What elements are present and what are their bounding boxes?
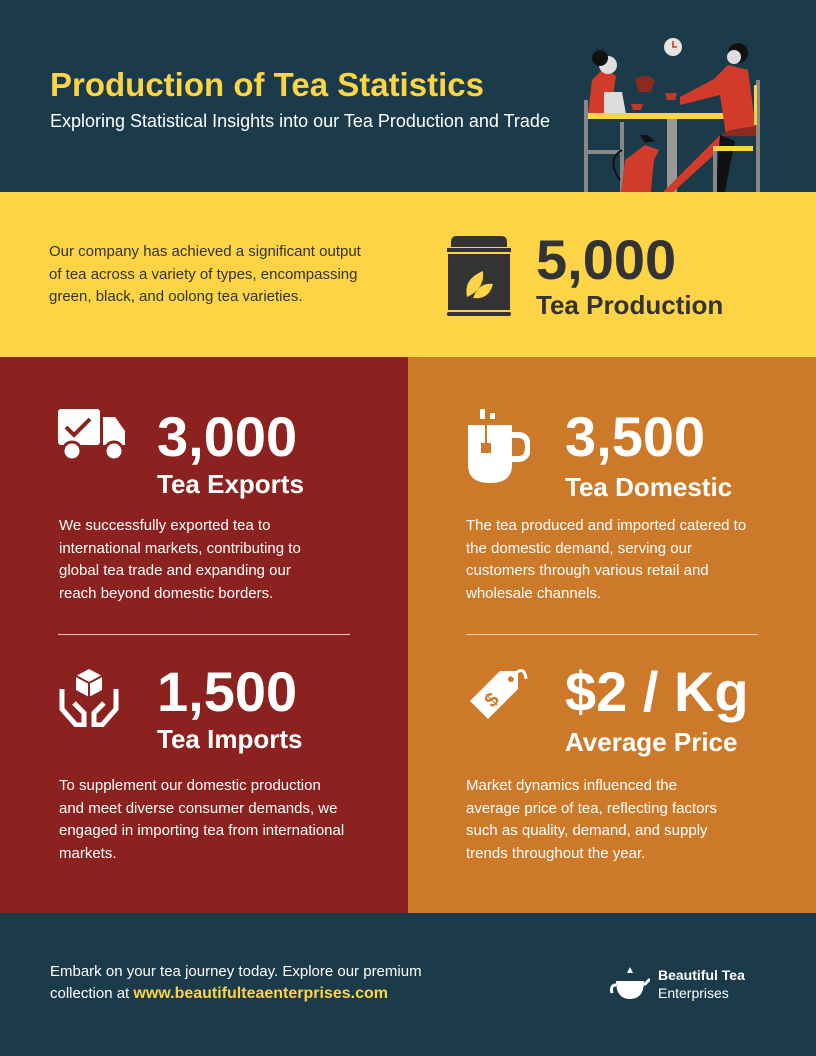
price text: Market dynamics influenced the average price of tea, reflecting factors such as quality, demand, and supply trends throughout the year. [466, 777, 717, 862]
icon: hands with box [60, 669, 118, 727]
logo: Enterprises [658, 985, 729, 1001]
title: Production of Tea Statistics [50, 66, 484, 103]
logo: Beautiful Tea [658, 967, 745, 983]
stat: tea domestic: 3,500 [565, 405, 705, 468]
panel: domestic and price [408, 357, 816, 913]
illustration: tea party [584, 38, 760, 192]
stat: tea production [536, 228, 723, 320]
stat: tea production: 5,000 [536, 228, 676, 291]
stat: tea exports: Tea Exports [157, 469, 304, 499]
stat: tea production: Tea Production [536, 290, 723, 320]
stat: tea imports: Tea Imports [157, 724, 302, 754]
icon: truck [58, 409, 125, 458]
production description: Our company has achieved a significant output of tea across a variety of types, encompassing green, black, and oolong tea varieties. [49, 243, 361, 305]
footer text: Embark on your tea journey today. Explore our premium collection at www.beautifulteaenterprises.com [50, 963, 422, 1002]
subtitle: Exploring Statistical Insights into our Tea Production and Trade [50, 111, 550, 131]
stat: tea imports [157, 660, 302, 754]
stat: tea imports: 1,500 [157, 660, 297, 723]
stat: average price: Average Price [565, 727, 737, 757]
icon: tea tin [447, 236, 511, 316]
icon: price tag: $ [480, 689, 504, 712]
yellow production panel [0, 192, 816, 357]
icon: mug [468, 409, 530, 483]
stat: tea domestic: Tea Domestic [565, 472, 732, 502]
icon: price tag [470, 669, 528, 719]
imports text: To supplement our domestic production and meet diverse consumer demands, we engaged in importing tea from international markets. [59, 777, 344, 862]
stat: tea exports [157, 405, 304, 499]
exports text: We successfully exported tea to international markets, contributing to global tea trade and expanding our reach beyond domestic borders. [59, 517, 301, 602]
stat: tea exports: 3,000 [157, 405, 297, 468]
logo [610, 967, 745, 1001]
footer [0, 913, 816, 1056]
panel: exports and imports [0, 357, 408, 913]
domestic text: The tea produced and imported catered to the domestic demand, serving our customers through various retail and wholesale channels. [466, 517, 746, 602]
header panel [0, 0, 816, 192]
stat: average price: $2 / Kg [565, 660, 749, 723]
stat: tea domestic [565, 405, 732, 502]
stat: average price [565, 660, 749, 757]
